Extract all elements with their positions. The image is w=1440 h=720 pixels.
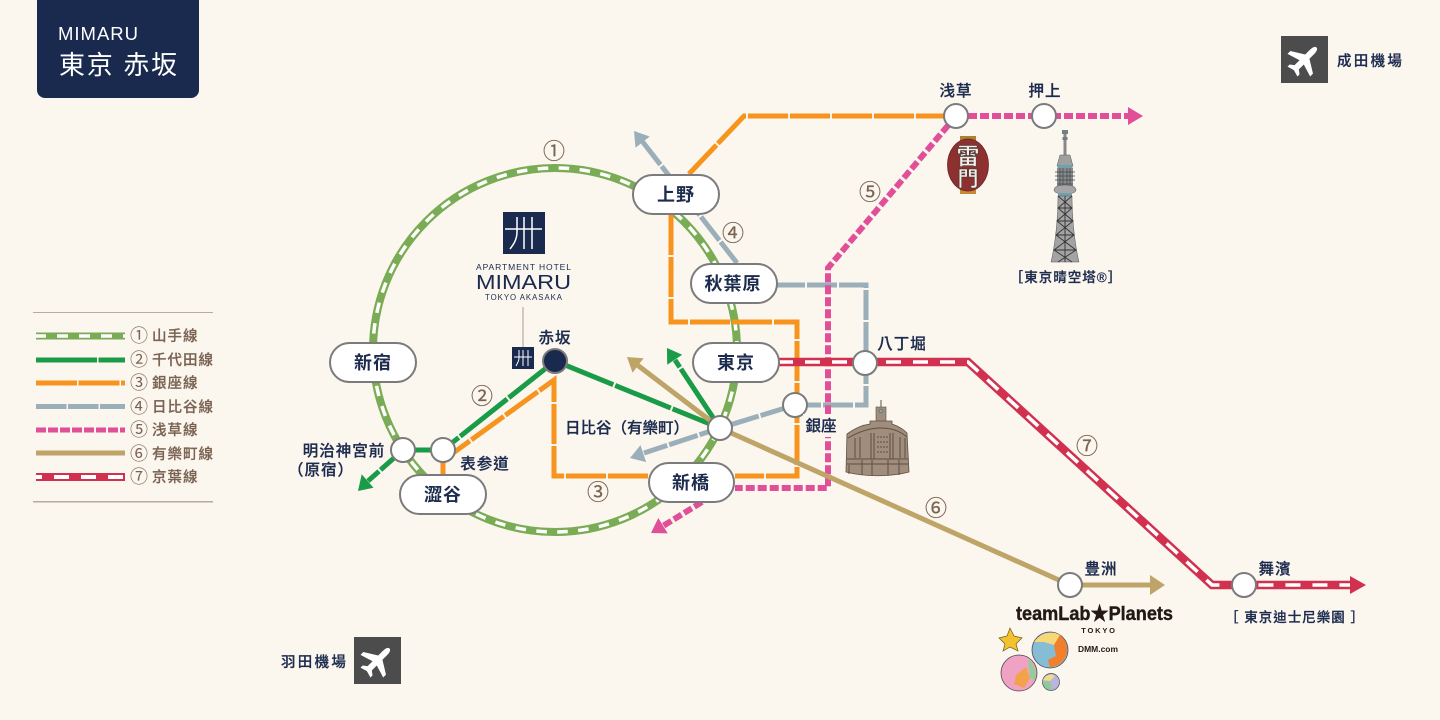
hotel location pin <box>512 307 534 369</box>
legend row: Ginza line: 銀座線 <box>152 374 198 392</box>
station labels: （原宿） <box>288 461 354 479</box>
line number markers: ① <box>543 139 565 164</box>
legend: line list <box>33 312 214 502</box>
icon: Narita airport <box>1281 36 1404 83</box>
legend row: Ginza line <box>36 373 198 393</box>
icon: small planet <box>1042 674 1060 690</box>
station labels <box>288 82 1365 625</box>
legend row: Chiyoda line: ② <box>130 350 148 370</box>
hotel logo: TOKYO AKASAKA <box>485 293 563 302</box>
station labels: ［東京晴空塔®］ <box>1010 269 1122 285</box>
legend row: Asakusa line <box>36 420 198 440</box>
Akasaka station marker <box>543 349 567 373</box>
rail line 3: Ginza <box>443 116 956 478</box>
icon: blue orange planet <box>1032 632 1068 668</box>
station labels: 表参道 <box>460 454 510 473</box>
legend row: Keiyo line: ⑦ <box>130 467 148 487</box>
legend row: Asakusa line: ⑤ <box>130 420 148 440</box>
line number markers: ③ <box>587 480 609 505</box>
rail line 4: Hibiya <box>630 131 866 462</box>
station labels: 赤坂 <box>538 329 572 347</box>
legend row: Chiyoda line: 千代田線 <box>152 352 214 369</box>
icon: pink planet <box>1001 655 1037 691</box>
legend row: Yurakucho line: ⑥ <box>130 444 148 464</box>
station labels: 豊洲 <box>1084 560 1118 578</box>
station labels: 浅草 <box>939 82 973 100</box>
station labels: 押上 <box>1028 82 1062 100</box>
icon: Kaminarimon lantern: 門 <box>958 168 978 191</box>
icon: Kaminarimon lantern: 雷 <box>956 143 980 169</box>
station labels: 銀座 <box>805 417 837 435</box>
station labels: 明治神宮前 <box>303 441 385 460</box>
line number markers: ⑥ <box>925 496 947 521</box>
icon: Narita airport: 成田機場 <box>1337 53 1404 70</box>
line number markers: ⑦ <box>1076 434 1098 459</box>
line number markers: ② <box>471 384 493 409</box>
icon: star <box>999 628 1022 651</box>
header: hotel name tab: MIMARU <box>58 23 139 44</box>
station labels: ［ 東京迪士尼樂園 ］ <box>1225 609 1365 625</box>
legend row: Yamanote line: ① <box>130 326 148 346</box>
icon: Tokyo Station building <box>846 400 909 476</box>
header: hotel name tab: 東京 赤坂 <box>59 50 179 80</box>
station labels: 日比谷（有樂町） <box>565 419 689 437</box>
legend row: Chiyoda line <box>36 350 214 370</box>
legend row: Keiyo line <box>36 467 198 487</box>
major station pills <box>330 175 779 514</box>
legend row: Keiyo line: 京葉線 <box>152 468 198 486</box>
icon: Kaminarimon lantern <box>948 136 988 194</box>
major station names: 上野 <box>657 185 695 205</box>
major station names: 新宿 <box>354 352 392 373</box>
legend row: Hibiya line: ④ <box>130 397 148 417</box>
rail line 1: Yamanote ring <box>373 168 737 532</box>
icon: Tokyo Skytree <box>1051 130 1079 262</box>
line number markers <box>471 139 1098 521</box>
small station circles <box>391 104 1256 597</box>
hotel logo <box>476 212 571 302</box>
icon: Haneda airport <box>281 637 401 684</box>
legend row: Yamanote line <box>36 326 198 346</box>
legend row: Hibiya line: 日比谷線 <box>152 399 214 416</box>
rail line 7: Keiyo <box>778 362 1366 594</box>
legend row: Asakusa line: 浅草線 <box>152 422 198 439</box>
line number markers: ⑤ <box>859 180 881 205</box>
legend row: Yamanote line: 山手線 <box>152 328 198 345</box>
station labels: 八丁堀 <box>877 335 927 353</box>
major station names: 秋葉原 <box>704 274 762 294</box>
major station names: 澀谷 <box>424 485 462 505</box>
station labels: 舞濱 <box>1258 559 1292 578</box>
rail line 2: Chiyoda <box>358 348 720 491</box>
rail line 6: Yurakucho <box>627 357 1165 595</box>
major station names <box>354 185 762 505</box>
header: hotel name tab <box>37 0 199 98</box>
icon: teamLab Planets logo: teamLab★Planets <box>1016 603 1173 625</box>
icon: Haneda airport: 羽田機場 <box>281 654 348 671</box>
hotel logo: MIMARU <box>476 272 571 294</box>
icon: teamLab Planets logo: TOKYO <box>1081 626 1117 635</box>
legend row: Ginza line: ③ <box>130 373 148 393</box>
legend row: Yurakucho line <box>36 444 214 464</box>
hotel logo: APARTMENT HOTEL <box>476 262 571 272</box>
icon: teamLab Planets logo: DMM.com <box>1078 644 1118 654</box>
major station names: 新橋 <box>672 472 710 493</box>
line number markers: ④ <box>722 221 744 246</box>
legend row: Yurakucho line: 有樂町線 <box>152 446 214 463</box>
rail line 5: Asakusa <box>651 107 1143 533</box>
legend row: Hibiya line <box>36 397 214 417</box>
icon: teamLab Planets logo <box>999 603 1173 691</box>
major station names: 東京 <box>717 352 755 373</box>
